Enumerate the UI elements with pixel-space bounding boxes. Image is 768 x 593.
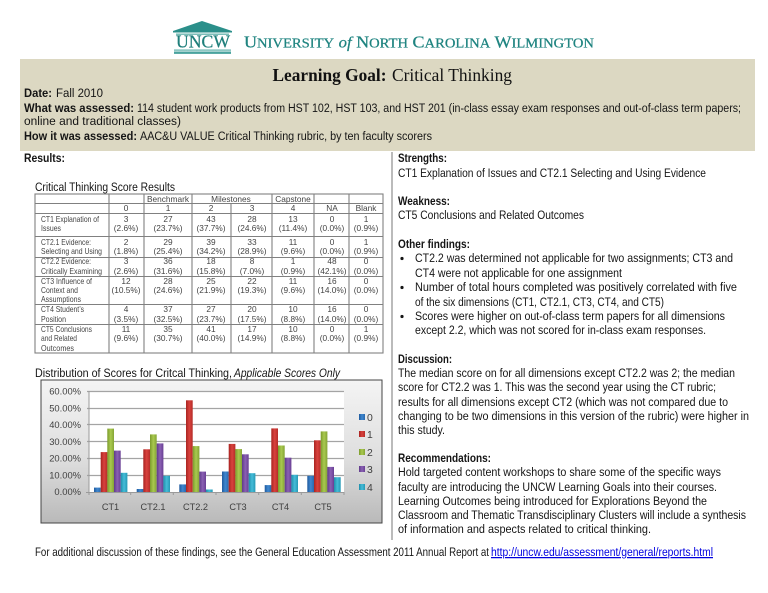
row: CT2.2: (42.1%) bbox=[317, 266, 347, 276]
other findings bbox=[398, 237, 737, 337]
table header: NA bbox=[326, 203, 338, 213]
row: CT3: 28 bbox=[163, 276, 173, 286]
strengths: CT1 Explanation of Issues and CT2.1 Selecting and Using Evidence bbox=[398, 166, 706, 180]
assessment details: online and traditional classes) bbox=[24, 114, 181, 128]
row: CT4: (14.0%) bbox=[317, 314, 347, 324]
legend: 2 bbox=[367, 448, 373, 459]
row: CT1: 43 bbox=[206, 214, 216, 224]
row: CT5: (30.7%) bbox=[153, 333, 183, 343]
row: CT5: 1 bbox=[364, 324, 369, 334]
row: CT4: (0.0%) bbox=[354, 314, 378, 324]
y axis labels: 30.00% bbox=[49, 436, 81, 447]
row: CT4: (8.8%) bbox=[281, 314, 305, 324]
discussion: this study. bbox=[398, 423, 445, 437]
row: CT2.2: (2.6%) bbox=[114, 266, 138, 276]
row: CT5: 10 bbox=[288, 324, 298, 334]
other findings: Other findings: bbox=[398, 237, 470, 251]
row: CT3: (0.0%) bbox=[354, 285, 378, 295]
row: CT5: (0.9%) bbox=[354, 333, 378, 343]
column divider bbox=[392, 152, 393, 540]
row: CT3: 22 bbox=[247, 276, 257, 286]
other findings: Scores were higher on out-of-class term papers for all dimensions bbox=[415, 309, 725, 323]
assessment details bbox=[24, 86, 741, 143]
y axis labels: 60.00% bbox=[49, 386, 81, 396]
logo: UNCW temple: UNCW bbox=[176, 32, 230, 52]
row: CT3: 25 bbox=[206, 276, 216, 286]
row: CT2.1: 0 bbox=[330, 237, 335, 247]
row: CT4: (3.5%) bbox=[114, 314, 138, 324]
bars: CT5 bbox=[307, 431, 341, 492]
table header bbox=[124, 194, 377, 213]
row: CT4: (17.5%) bbox=[237, 314, 267, 324]
other findings: CT4 were not applicable for one assignment bbox=[415, 266, 622, 280]
row: CT3: (14.0%) bbox=[317, 285, 347, 295]
score results table bbox=[35, 194, 383, 353]
row: CT3: Context and bbox=[41, 285, 78, 295]
row: CT3: (21.9%) bbox=[196, 285, 226, 295]
bars: CT4 bbox=[265, 428, 298, 492]
row: CT5: 17 bbox=[247, 324, 257, 334]
row: CT2.1: 33 bbox=[247, 237, 257, 247]
title: Critical Thinking bbox=[392, 65, 512, 85]
row: CT3: (10.5%) bbox=[111, 285, 141, 295]
row: CT1: (2.6%) bbox=[114, 223, 138, 233]
row: CT1: Issues bbox=[41, 223, 61, 233]
row: CT2.1: 11 bbox=[289, 237, 298, 247]
y axis labels bbox=[49, 386, 81, 497]
row: CT5: 35 bbox=[163, 324, 173, 334]
row: CT3: (19.3%) bbox=[237, 285, 267, 295]
row: CT5: and Related bbox=[41, 333, 77, 343]
row: CT5: (0.0%) bbox=[320, 333, 344, 343]
row: CT2.2: 3 bbox=[124, 256, 129, 266]
bars: CT3 bbox=[222, 444, 255, 492]
row: CT5 bbox=[41, 324, 378, 353]
assessment details: What was assessed: bbox=[24, 101, 134, 115]
title bbox=[272, 65, 512, 85]
recommendations: Recommendations: bbox=[398, 451, 491, 465]
row: CT5: 0 bbox=[330, 324, 335, 334]
discussion: Discussion: bbox=[398, 352, 452, 366]
other findings: of the six dimensions (CT1, CT2.1, CT3, CT4, and CT5) bbox=[415, 295, 664, 309]
row: CT2.1 bbox=[41, 237, 378, 256]
row: CT4: 16 bbox=[327, 304, 337, 314]
row: CT2.2: CT2.2 Evidence: bbox=[41, 256, 91, 266]
table header: Benchmark bbox=[147, 194, 190, 204]
legend bbox=[359, 413, 373, 494]
row: CT3: (9.6%) bbox=[281, 285, 305, 295]
table title: Critical Thinking Score Results bbox=[35, 180, 175, 194]
row: CT4: (23.7%) bbox=[196, 314, 226, 324]
weakness bbox=[398, 194, 584, 222]
row: CT2.1: (25.4%) bbox=[153, 246, 183, 256]
category labels: CT4 bbox=[272, 502, 289, 512]
row: CT3: 12 bbox=[121, 276, 131, 286]
y axis labels: 10.00% bbox=[49, 470, 81, 480]
logo: university name: UNIVERSITY of NORTH CAROLINA WILMINGTON bbox=[244, 32, 594, 52]
footer note: http://uncw.edu/assessment/general/reports.html bbox=[491, 545, 713, 559]
row: CT4: 27 bbox=[206, 304, 216, 314]
row: CT4: 4 bbox=[124, 304, 129, 314]
table header: Milestones bbox=[211, 194, 251, 204]
footer note: For additional discussion of these findings, see the General Education Assessment 2011 Annual Report at bbox=[35, 545, 489, 559]
legend: 4 bbox=[367, 483, 373, 494]
row: CT5: CT5 Conclusions bbox=[41, 324, 92, 334]
row: CT4: 10 bbox=[288, 304, 298, 314]
row: CT2.2: (0.0%) bbox=[354, 266, 378, 276]
row: CT5: 11 bbox=[122, 324, 131, 334]
row: CT2.2: 18 bbox=[206, 256, 216, 266]
y axis labels: 50.00% bbox=[49, 402, 81, 414]
row: CT2.1: 29 bbox=[163, 237, 173, 247]
row: CT5: (8.8%) bbox=[281, 333, 305, 343]
row: CT1: 13 bbox=[288, 214, 298, 224]
strengths: Strengths: bbox=[398, 151, 447, 165]
row: CT4 bbox=[41, 304, 378, 324]
row: CT3: 16 bbox=[327, 276, 337, 286]
row: CT2.2: 1 bbox=[291, 256, 296, 266]
row: CT4: 20 bbox=[247, 304, 257, 314]
row: CT2.1: 1 bbox=[364, 237, 369, 247]
legend: 1 bbox=[367, 430, 373, 441]
row: CT5: 41 bbox=[206, 324, 216, 334]
chart title: Distribution of Scores for Critcal Thinking, bbox=[35, 366, 232, 380]
bars: CT2.2 bbox=[179, 400, 213, 492]
row: CT1 bbox=[41, 214, 378, 233]
recommendations: Hold targeted content workshops to share some of the specific ways bbox=[398, 465, 721, 479]
row: CT2.2 bbox=[41, 256, 378, 276]
row: CT1: 1 bbox=[364, 214, 369, 224]
row: CT2.2: 0 bbox=[364, 256, 369, 266]
row: CT1: (11.4%) bbox=[279, 223, 307, 233]
table header: Blank bbox=[356, 203, 377, 213]
table header: 1 bbox=[166, 203, 171, 213]
row: CT1: (0.0%) bbox=[320, 223, 344, 233]
discussion bbox=[398, 352, 749, 437]
row: CT2.2: (15.8%) bbox=[196, 266, 226, 276]
category labels: CT5 bbox=[314, 502, 332, 512]
legend: 0 bbox=[367, 413, 373, 424]
row: CT1: 28 bbox=[247, 214, 257, 224]
recommendations: faculty are introducing the UNCW Learning Goals into their courses. bbox=[398, 480, 717, 494]
discussion: score for CT2.2 was 1. This was the second year using the CT rubric; bbox=[398, 380, 716, 394]
weakness: CT5 Conclusions and Related Outcomes bbox=[398, 208, 584, 222]
row: CT1: CT1 Explanation of bbox=[41, 214, 100, 224]
row: CT3: CT3 Influence of bbox=[41, 276, 93, 286]
row: CT2.2: 36 bbox=[163, 256, 173, 266]
assessment details: How it was assessed: bbox=[24, 129, 137, 143]
row: CT2.1: Selecting and Using bbox=[41, 246, 102, 256]
row: CT5: (40.0%) bbox=[196, 333, 226, 343]
row: CT4: 0 bbox=[364, 304, 369, 314]
y axis labels: 40.00% bbox=[49, 419, 81, 430]
results heading: Results: bbox=[24, 151, 65, 165]
strengths bbox=[398, 151, 706, 180]
row: CT2.1: (34.2%) bbox=[196, 246, 226, 256]
row: CT2.1: (1.8%) bbox=[114, 246, 138, 256]
table header: 0 bbox=[124, 203, 129, 213]
row: CT2.1: (28.9%) bbox=[237, 246, 267, 256]
row: CT3 bbox=[41, 276, 378, 304]
row: CT2.1: (9.6%) bbox=[281, 246, 305, 256]
row: CT2.2: (0.9%) bbox=[281, 266, 305, 276]
row: CT2.1: (0.0%) bbox=[320, 246, 344, 256]
table header: 2 bbox=[209, 203, 214, 213]
row: CT1: (37.7%) bbox=[196, 223, 226, 233]
row: CT2.2: (7.0%) bbox=[240, 266, 264, 276]
recommendations: of information and aspects related to critical thinking. bbox=[398, 522, 651, 536]
row: CT3: 11 bbox=[289, 276, 298, 286]
row: CT3: Assumptions bbox=[41, 294, 81, 304]
table header: 3 bbox=[250, 203, 255, 213]
row: CT4: Position bbox=[41, 314, 66, 324]
row: CT4: CT4 Student’s bbox=[41, 304, 84, 314]
row: CT1: 0 bbox=[330, 214, 335, 224]
table header: Capstone bbox=[275, 194, 311, 204]
weakness: Weakness: bbox=[398, 194, 450, 208]
row: CT4: (32.5%) bbox=[153, 314, 183, 324]
row: CT2.2: (31.6%) bbox=[153, 266, 183, 276]
row: CT1: 3 bbox=[124, 214, 129, 224]
row: CT1: (23.7%) bbox=[153, 223, 183, 233]
row: CT2.1: CT2.1 Evidence: bbox=[41, 237, 91, 247]
bar chart bbox=[41, 380, 382, 523]
category labels: CT2.1 bbox=[140, 502, 166, 512]
bars: CT2.1 bbox=[137, 434, 170, 492]
table header: 4 bbox=[291, 203, 296, 213]
row: CT2.1: 2 bbox=[124, 237, 129, 247]
row: CT2.1: 39 bbox=[206, 237, 216, 247]
row: CT2.2: 48 bbox=[327, 256, 337, 266]
row: CT2.2: Critically Examining bbox=[41, 266, 102, 276]
row: CT1: 27 bbox=[163, 214, 173, 224]
bars: CT1 bbox=[94, 429, 127, 492]
category labels: CT2.2 bbox=[183, 502, 208, 512]
row: CT2.2: 8 bbox=[250, 256, 255, 266]
row: CT5: Outcomes bbox=[41, 343, 74, 353]
other findings: except 2.2, which was not scored for in-class exam responses. bbox=[415, 323, 706, 337]
title: Learning Goal: bbox=[272, 65, 386, 85]
assessment details: Date: bbox=[24, 86, 52, 100]
row: CT1: (24.6%) bbox=[237, 223, 267, 233]
category labels bbox=[102, 502, 332, 512]
row: CT3: (24.6%) bbox=[153, 285, 183, 295]
row: CT3: 0 bbox=[364, 276, 369, 286]
row: CT5: (9.6%) bbox=[114, 333, 138, 343]
row: CT4: 37 bbox=[163, 304, 173, 314]
assessment details: Fall 2010 bbox=[56, 86, 103, 100]
legend: 3 bbox=[367, 465, 373, 476]
chart title: Applicable Scores Only bbox=[233, 366, 341, 380]
assessment details: AAC&U VALUE Critical Thinking rubric, by ten faculty scorers bbox=[140, 129, 432, 143]
category labels: CT3 bbox=[229, 502, 247, 512]
recommendations bbox=[398, 451, 746, 536]
category labels: CT1 bbox=[102, 502, 119, 512]
y axis labels: 0.00% bbox=[54, 486, 81, 497]
header band bbox=[20, 59, 755, 151]
recommendations: Learning Outcomes being introduced for Explorations Beyond the bbox=[398, 494, 707, 508]
row: CT5: (14.9%) bbox=[237, 333, 267, 343]
row: CT1: (0.9%) bbox=[354, 223, 378, 233]
row: CT2.1: (0.9%) bbox=[354, 246, 378, 256]
y axis labels: 20.00% bbox=[49, 452, 81, 464]
logo: UNCW temple bbox=[173, 21, 232, 54]
